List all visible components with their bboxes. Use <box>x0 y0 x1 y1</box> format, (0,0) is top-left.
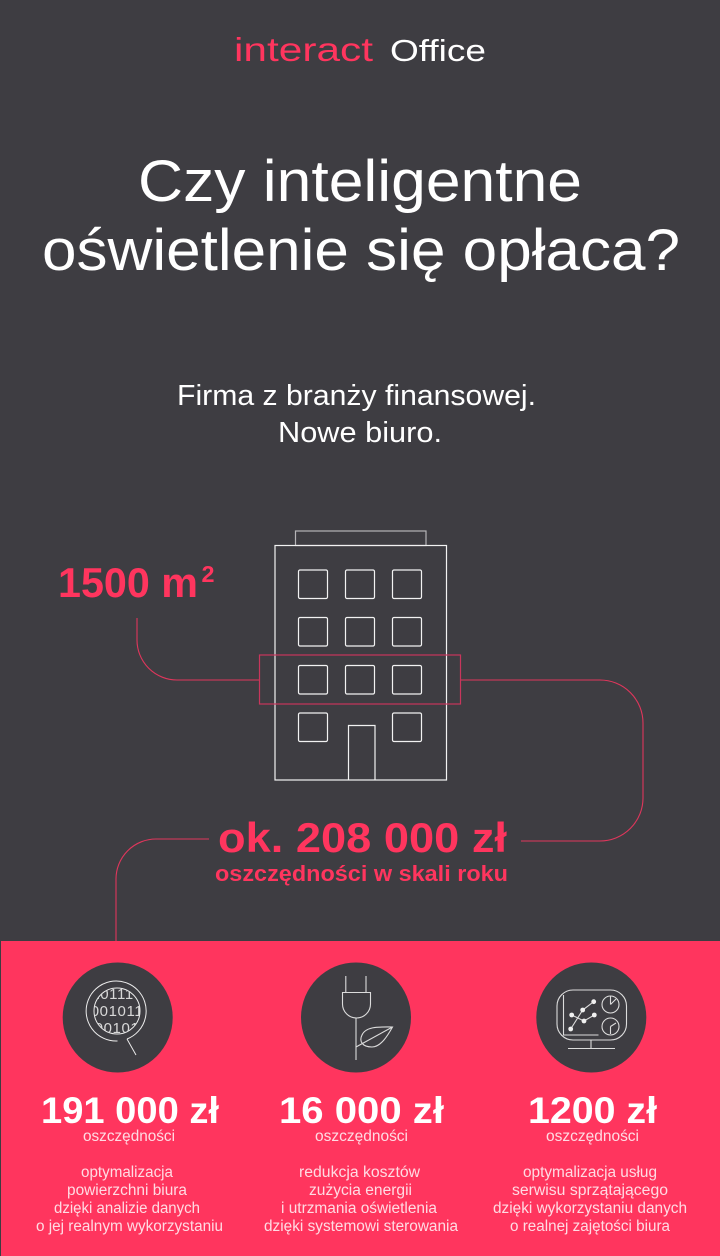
title: oświetlenie się opłaca? <box>42 218 680 283</box>
column 1: office space: o jej realnym wykorzystaniu <box>36 1218 223 1235</box>
subtitle: Nowe biuro. <box>278 417 442 449</box>
logo: Office <box>390 33 486 68</box>
highlighted floor <box>260 655 460 704</box>
connector: floor to savings <box>461 680 643 841</box>
binary digits: 001011 <box>91 1003 143 1020</box>
area label: 1500 m2: 1500 m <box>58 559 198 606</box>
column 3: cleaning: dzięki wykorzystaniu danych <box>493 1200 687 1217</box>
icon: magnifier with data <box>63 962 173 1072</box>
panel: savings breakdown <box>1 941 720 1256</box>
column 3: cleaning: o realnej zajętości biura <box>510 1218 670 1235</box>
binary digits: 101110 <box>91 986 143 1003</box>
column 2: energy: zużycia energii <box>309 1182 412 1199</box>
column 2: energy: 16 000 zł <box>279 1089 445 1131</box>
area label: 1500 m2: 2 <box>202 561 214 587</box>
icon: office building <box>275 531 446 780</box>
column 2: energy: oszczędności <box>315 1128 408 1145</box>
connector: area to floor <box>137 618 259 680</box>
column 1: office space: dzięki analizie danych <box>54 1200 200 1217</box>
logo: interact <box>234 31 373 68</box>
subtitle <box>177 380 536 449</box>
icon: dashboard monitor <box>536 962 646 1072</box>
column 3: cleaning: 1200 zł <box>528 1089 658 1131</box>
column 2: energy: redukcja kosztów <box>299 1164 421 1181</box>
column 3: cleaning: oszczędności <box>546 1128 639 1145</box>
total savings: ok. 208 000 zł <box>218 814 507 861</box>
subtitle: Firma z branży finansowej. <box>177 380 536 412</box>
column 2: energy <box>264 1089 458 1235</box>
column 3: cleaning: serwisu sprzątającego <box>512 1182 668 1199</box>
logo <box>234 31 486 68</box>
column 1: office space: oszczędności <box>83 1128 175 1145</box>
binary digits: 00101 <box>95 1020 139 1037</box>
column 1: office space: powierzchni biura <box>67 1182 187 1199</box>
title <box>42 149 680 283</box>
column 1: office space <box>36 1089 223 1235</box>
icon: plug and leaf <box>301 962 411 1072</box>
total savings: oszczędności w skali roku <box>215 861 508 886</box>
column 3: cleaning: optymalizacja usług <box>523 1164 657 1181</box>
connector: savings to panel <box>116 839 209 941</box>
column 2: energy: dzięki systemowi sterowania <box>264 1218 458 1235</box>
column 2: energy: i utrzmania oświetlenia <box>281 1200 437 1217</box>
column 3: cleaning <box>493 1089 687 1235</box>
title: Czy inteligentne <box>138 149 582 214</box>
total savings <box>215 814 508 886</box>
column 1: office space: optymalizacja <box>81 1164 173 1181</box>
binary digits <box>94 989 140 1033</box>
column 1: office space: 191 000 zł <box>41 1089 220 1131</box>
